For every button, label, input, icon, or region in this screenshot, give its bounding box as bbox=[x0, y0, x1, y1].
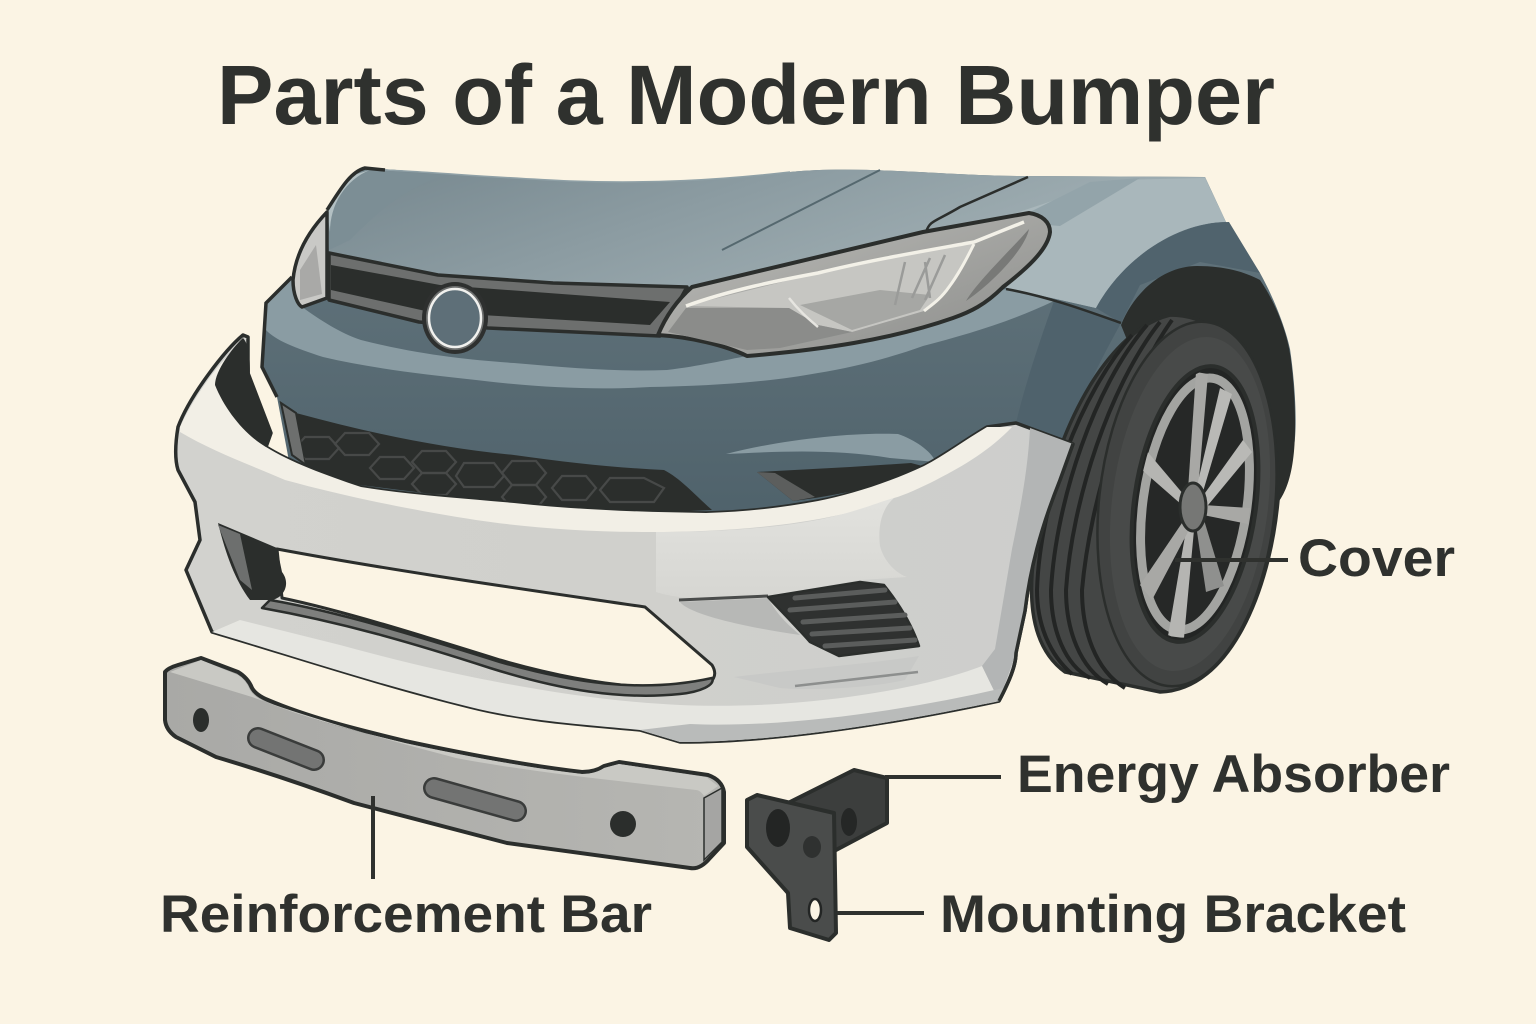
top highlight band bbox=[180, 345, 1012, 532]
mid panel bbox=[656, 498, 907, 599]
hood left shade bbox=[329, 170, 445, 250]
tread grooves bbox=[1037, 320, 1172, 688]
slots bbox=[258, 738, 314, 760]
upper fog lamp recess bbox=[726, 434, 936, 501]
fender highlight bbox=[1003, 178, 1226, 308]
rim bbox=[1115, 358, 1275, 650]
dark side panel bbox=[1016, 301, 1121, 444]
body silhouette bbox=[262, 168, 1296, 520]
wheel and tyre bbox=[1032, 313, 1294, 695]
honeycomb mesh bbox=[295, 433, 664, 509]
reinforcement bar bbox=[165, 658, 724, 868]
title: Parts of a Modern Bumper bbox=[217, 48, 1275, 142]
outer corner line bbox=[999, 444, 1073, 701]
lip strip bbox=[262, 600, 713, 696]
label: Reinforcement Bar: Reinforcement Bar bbox=[160, 885, 652, 944]
spokes bbox=[1140, 372, 1252, 638]
end face bbox=[704, 788, 722, 860]
body outlines bbox=[327, 168, 385, 210]
emblem bbox=[422, 282, 488, 354]
lower crease bbox=[734, 656, 919, 689]
top face bbox=[170, 660, 718, 796]
absorber box bbox=[790, 770, 887, 850]
hood and fender bbox=[327, 168, 1226, 308]
lower lip shade bbox=[640, 688, 1003, 742]
hood crease lines bbox=[722, 170, 880, 250]
body highlight band bbox=[266, 277, 1054, 388]
label: Mounting Bracket: Mounting Bracket bbox=[940, 885, 1406, 944]
bracket plate bbox=[747, 795, 836, 940]
cover opening bbox=[277, 549, 715, 688]
upper grille bbox=[329, 253, 687, 354]
bar body bbox=[165, 658, 724, 868]
fog lamp vent bbox=[768, 582, 919, 656]
corner lamp bbox=[293, 212, 327, 307]
lens bbox=[686, 242, 974, 332]
headlight bbox=[658, 213, 1050, 356]
right edge shade bbox=[972, 428, 1073, 704]
lower grille bbox=[281, 403, 712, 515]
bolt holes bbox=[193, 708, 209, 732]
bumper cover bbox=[176, 335, 1073, 742]
wheel arch band bbox=[1096, 222, 1260, 323]
cover shape bbox=[176, 335, 1073, 742]
leader lines bbox=[373, 560, 1288, 913]
mounting bracket and energy absorber bbox=[747, 770, 887, 940]
lower lip light area bbox=[212, 620, 999, 742]
label: Cover: Cover bbox=[1298, 529, 1455, 588]
wheel arch black bbox=[1121, 266, 1295, 520]
sidewall bbox=[1080, 313, 1294, 695]
tyre bbox=[1032, 315, 1278, 692]
left inner black bbox=[215, 338, 271, 447]
hub bbox=[1180, 483, 1206, 531]
left vent bbox=[218, 523, 286, 600]
label: Energy Absorber: Energy Absorber bbox=[1017, 745, 1450, 804]
infographic: parts of a modern bumper bbox=[163, 62, 1454, 943]
hood shadow streak bbox=[1010, 178, 1140, 226]
fog lamp line bbox=[679, 596, 768, 600]
car front body bbox=[262, 168, 1296, 520]
